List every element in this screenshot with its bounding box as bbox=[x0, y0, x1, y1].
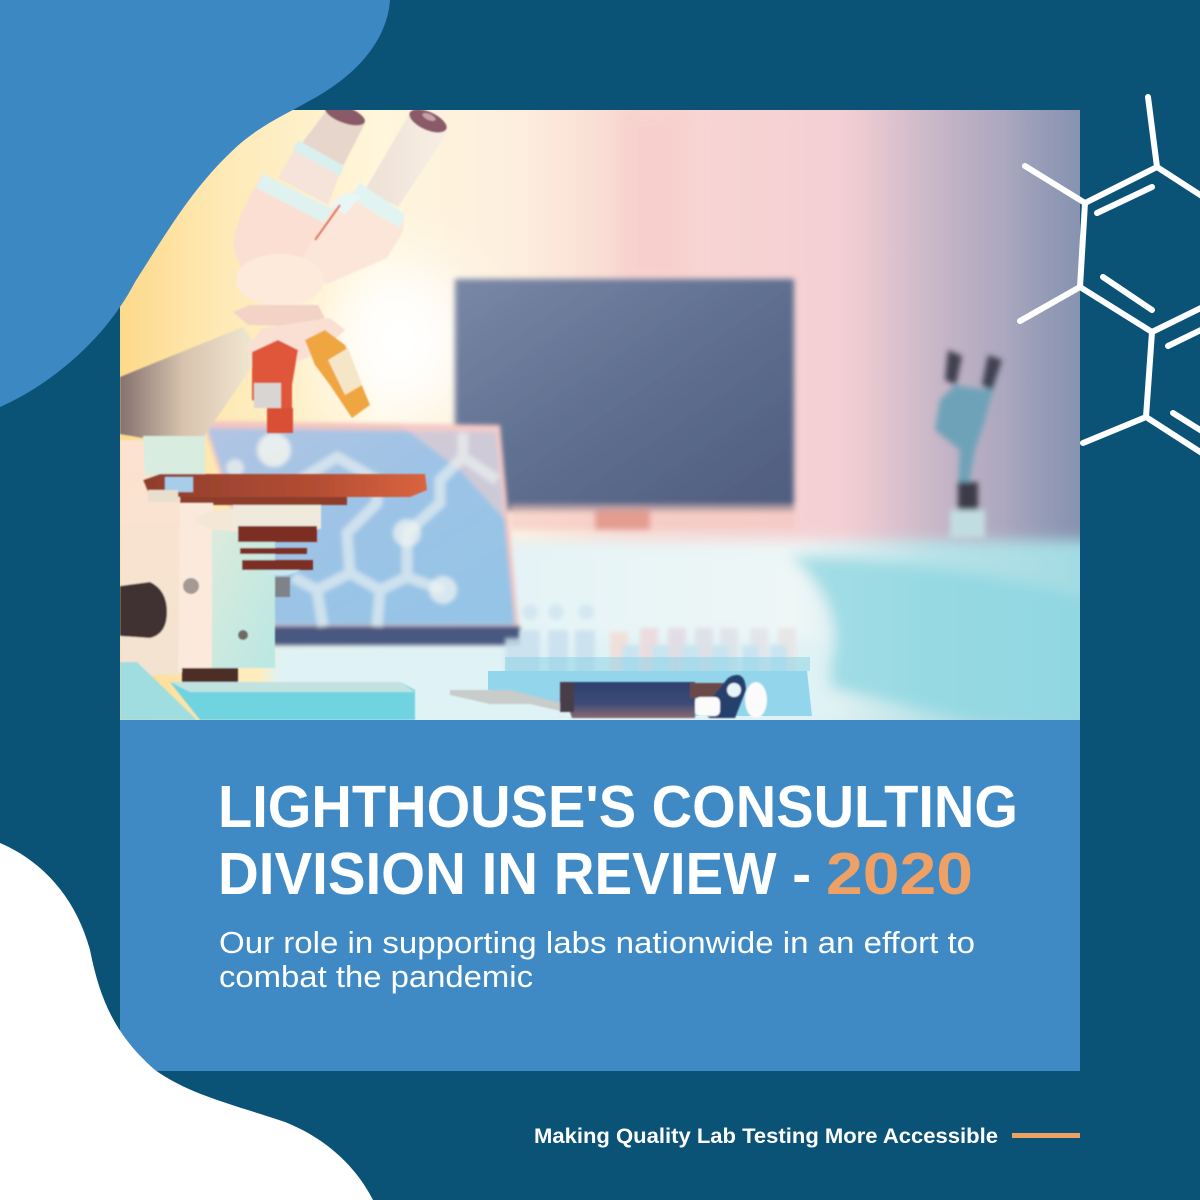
blob: bottom left bbox=[0, 843, 373, 1200]
red objective bbox=[252, 340, 298, 420]
nosepiece bbox=[233, 305, 325, 326]
title: 2020 bbox=[826, 841, 973, 907]
tube rack bbox=[488, 604, 812, 716]
footer accent line bbox=[1012, 1133, 1080, 1138]
photo: microscope in a laboratory bbox=[120, 100, 1100, 730]
condenser rings bbox=[238, 526, 317, 570]
title: LIGHTHOUSE'S CONSULTING bbox=[218, 774, 1018, 840]
panel: title background bbox=[120, 720, 1080, 1071]
footer tagline: Making Quality Lab Testing More Accessible bbox=[534, 1125, 998, 1148]
blurred monitor bbox=[455, 279, 795, 530]
focus knob bbox=[120, 582, 167, 638]
title bbox=[218, 774, 1018, 907]
column bbox=[178, 503, 213, 672]
icon: molecule outline bbox=[1020, 97, 1200, 455]
base bbox=[182, 668, 238, 682]
window glow bbox=[330, 260, 470, 420]
table surface bbox=[270, 540, 1100, 730]
eyepieces bbox=[278, 100, 450, 207]
pipette bbox=[450, 675, 767, 718]
window blinds bbox=[620, 110, 690, 285]
subtitle bbox=[219, 925, 975, 994]
subtitle: combat the pandemic bbox=[219, 959, 533, 994]
blob: top left bbox=[0, 0, 390, 407]
arm bbox=[120, 440, 180, 675]
title: DIVISION IN REVIEW - bbox=[218, 841, 811, 907]
microscope bbox=[120, 100, 450, 720]
subtitle: Our role in supporting labs nationwide in an effort to bbox=[219, 925, 975, 960]
binocular head bbox=[233, 182, 324, 267]
orange objective bbox=[305, 330, 370, 418]
blurred laptop with molecule on screen bbox=[203, 421, 520, 645]
stage bbox=[143, 474, 427, 497]
blurred small microscope bbox=[935, 350, 1002, 538]
